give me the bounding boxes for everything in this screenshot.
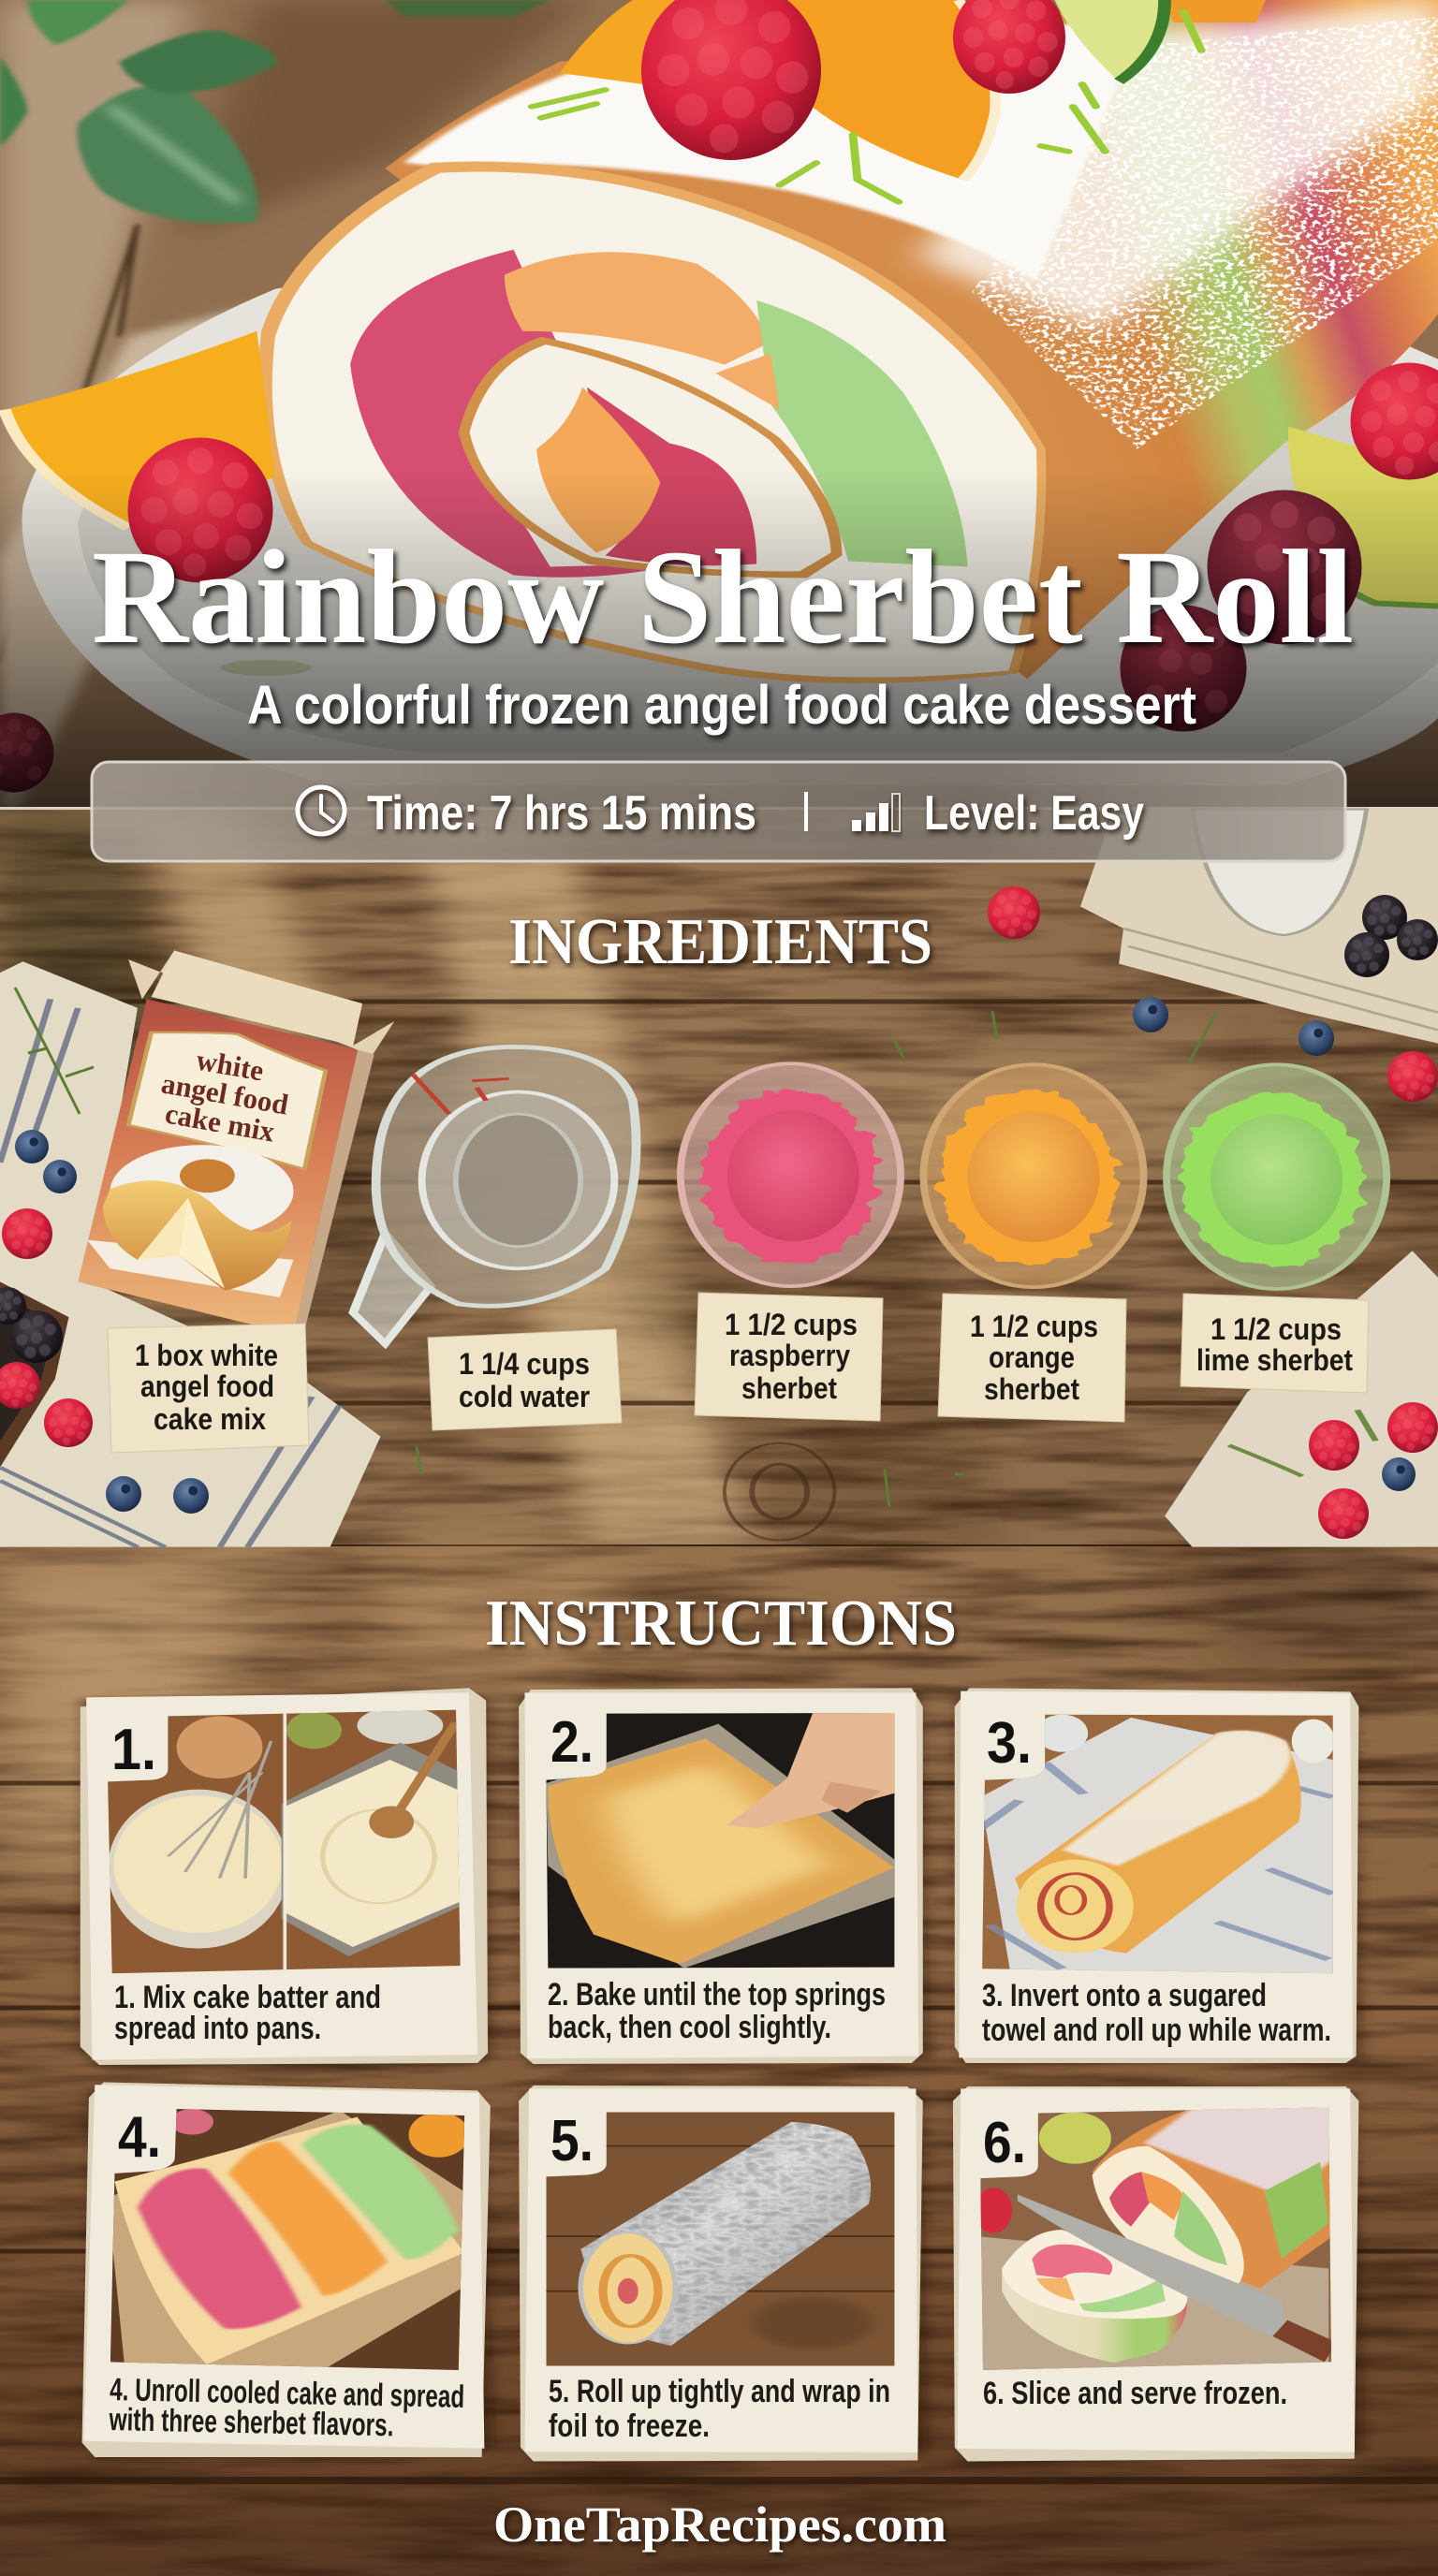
icon: level bars (852, 794, 900, 831)
note: cake mix (108, 1324, 309, 1453)
caption 4: 4. Unroll cooled cake and spread (110, 2372, 465, 2415)
note: cold water: cold water (459, 1380, 590, 1413)
card: step 5 (519, 2086, 926, 2464)
number 4: 4. (118, 2105, 161, 2170)
icon: green leaves (0, 0, 550, 223)
note: orange sherbet (938, 1294, 1126, 1422)
box of white angel food cake mix: white (194, 1043, 266, 1088)
caption 5: foil to freeze. (549, 2408, 710, 2444)
panel: instructions wood background (0, 1546, 1438, 2576)
note: lime sherbet (1181, 1294, 1369, 1393)
note: orange sherbet: orange (989, 1340, 1075, 1374)
box of white angel food cake mix (78, 951, 394, 1335)
bowl of orange sherbet (923, 1064, 1144, 1287)
note: raspberry sherbet: 1 1/2 cups (725, 1308, 858, 1341)
note: raspberry sherbet: raspberry (729, 1339, 850, 1372)
number 6: 6. (983, 2111, 1026, 2175)
bowl of lime sherbet (1167, 1064, 1387, 1289)
caption 2 (548, 1977, 886, 2045)
number 5: 5. (550, 2109, 594, 2174)
panel: hero photo of sherbet roll (0, 0, 1438, 812)
note: orange sherbet: 1 1/2 cups (970, 1310, 1098, 1343)
towel: left (0, 961, 381, 1547)
ingredients scene (0, 809, 1438, 1547)
caption 6: 6. Slice and serve frozen. (983, 2376, 1287, 2411)
serving plate (22, 288, 1438, 768)
roll cut face (258, 161, 1046, 683)
roll face (1093, 2146, 1244, 2288)
box of white angel food cake mix: cake mix (163, 1097, 277, 1149)
caption 4 (108, 2372, 465, 2445)
icon: scattered berries (0, 886, 1438, 1539)
note: cold water (428, 1329, 622, 1430)
caption 1 (114, 1980, 381, 2046)
time text: Time: 7 hrs 15 mins (367, 786, 756, 841)
orange slices (5, 0, 1266, 528)
tray of blackberries (0, 1281, 68, 1468)
caption 2: 2. Bake until the top springs (548, 1977, 886, 2012)
note: lime sherbet: 1 1/2 cups (1211, 1312, 1342, 1346)
knife (1018, 2194, 1287, 2336)
number 2: 2. (550, 1710, 594, 1775)
caption 3: towel and roll up while warm. (982, 2012, 1331, 2048)
lime zest (532, 11, 1201, 202)
hero wood table (0, 0, 1438, 810)
title: Rainbow Sherbet Roll (92, 523, 1354, 672)
caption 5 (549, 2374, 890, 2444)
caption 1: 1. Mix cake batter and (114, 1980, 381, 2015)
measuring cup of cold water (353, 1046, 637, 1343)
note: orange sherbet: sherbet (984, 1372, 1079, 1406)
note: cake mix: angel food (140, 1369, 274, 1403)
note: cake mix: 1 box white (135, 1339, 278, 1372)
icon: herb sprigs (15, 988, 1217, 1507)
roll body (1093, 2104, 1342, 2288)
card: step 2 (519, 1688, 929, 2067)
icon: clock (298, 787, 345, 834)
card: step 1 (81, 1688, 491, 2067)
card: step 3 (955, 1688, 1361, 2067)
heading: ingredients: INGREDIENTS (508, 906, 932, 978)
orange sherbet (505, 252, 770, 365)
card: step 4 (82, 2082, 494, 2460)
note: cake mix: cake mix (154, 1402, 266, 1436)
info bar: time and level (92, 762, 1345, 861)
level text: Level: Easy (924, 786, 1144, 841)
green sherbet (756, 300, 967, 566)
note: cold water: 1 1/4 cups (459, 1347, 590, 1381)
note: lime sherbet: lime sherbet (1196, 1343, 1353, 1377)
lime wedges (1055, 0, 1438, 606)
footer website: OneTapRecipes.com (493, 2496, 946, 2553)
caption 2: back, then cool slightly. (548, 2010, 831, 2045)
pink sherbet (350, 249, 646, 578)
caption 1: spread into pans. (114, 2011, 321, 2046)
bowl of raspberry sherbet (681, 1063, 901, 1286)
note: raspberry sherbet: sherbet (741, 1371, 837, 1405)
caption 3: 3. Invert onto a sugared (982, 1978, 1267, 2013)
card: step 6 (953, 2086, 1363, 2464)
box of white angel food cake mix: angel food (159, 1066, 291, 1121)
panel: ingredients wood background (0, 810, 1438, 1554)
caption 3 (982, 1978, 1331, 2048)
icon: raspberries on the roll and plate (0, 0, 1438, 792)
caption 4: with three sherbet flavors. (108, 2402, 394, 2443)
number 1: 1. (111, 1718, 156, 1782)
number 3: 3. (987, 1711, 1032, 1776)
caption 5: 5. Roll up tightly and wrap in (549, 2374, 890, 2409)
roll exterior with bands (385, 0, 1438, 679)
towel: bottom right (1165, 1251, 1438, 1547)
note: raspberry sherbet (695, 1293, 883, 1421)
slice (1002, 2230, 1187, 2363)
inner swirl (459, 337, 842, 578)
heading: instructions: INSTRUCTIONS (485, 1588, 957, 1660)
towel: top right (1080, 809, 1438, 1044)
separator (804, 792, 808, 831)
subtitle: A colorful frozen angel food cake dessert (247, 675, 1196, 736)
